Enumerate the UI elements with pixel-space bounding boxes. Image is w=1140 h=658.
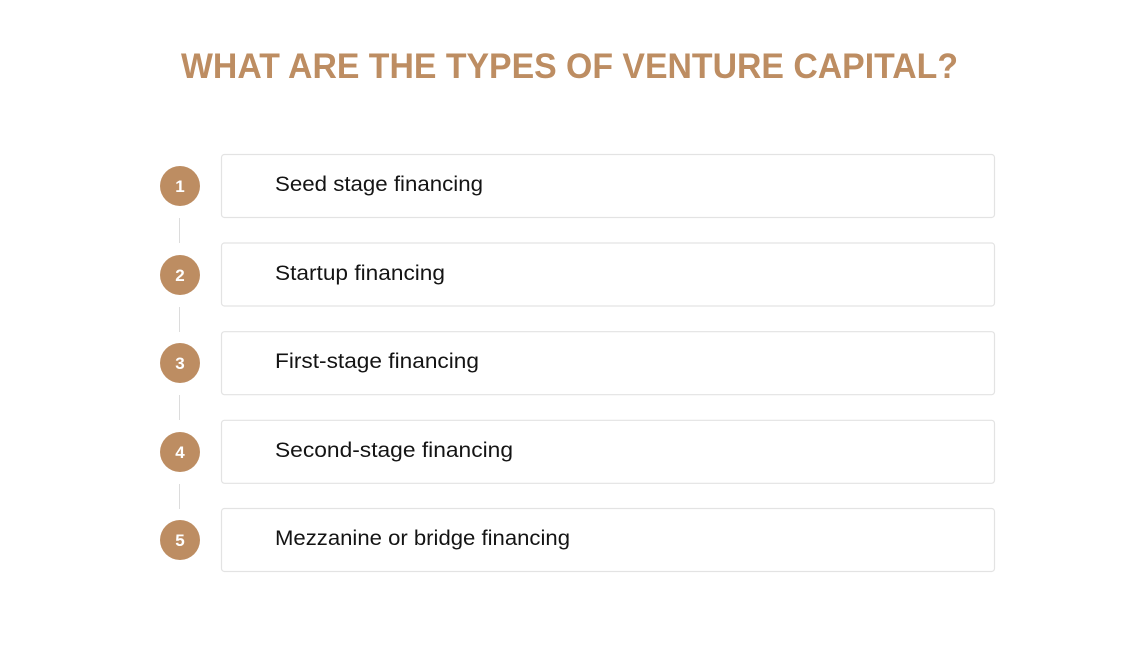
card 2: Startup financing [275, 262, 445, 285]
card 5 [222, 508, 994, 572]
number badge 5 [160, 520, 200, 560]
number badge 1: 1 [175, 177, 185, 196]
number badge 2: 2 [175, 266, 185, 285]
number badge 3: 3 [175, 354, 185, 373]
step 5: mezzanine or bridge financing [160, 508, 994, 572]
number badge 2 [160, 255, 200, 295]
card 3: First-stage financing [275, 350, 479, 373]
card 4: Second-stage financing [275, 439, 513, 462]
card 1: Seed stage financing [275, 173, 483, 196]
step 3: first-stage financing [160, 332, 994, 395]
number badge 5: 5 [175, 531, 185, 550]
card 1 [222, 154, 994, 218]
card 4 [222, 420, 994, 483]
number badge 4: 4 [175, 443, 185, 462]
number badge 1 [160, 166, 200, 206]
card 2 [222, 243, 994, 306]
card 3 [222, 332, 994, 395]
title: WHAT ARE THE TYPES OF VENTURE CAPITAL? [181, 47, 958, 86]
card 5: Mezzanine or bridge financing [275, 527, 570, 550]
step 4: second-stage financing [160, 420, 994, 483]
number badge 3 [160, 343, 200, 383]
step 1: seed stage financing [160, 154, 994, 218]
step 2: startup financing [160, 243, 994, 306]
number badge 4 [160, 432, 200, 472]
